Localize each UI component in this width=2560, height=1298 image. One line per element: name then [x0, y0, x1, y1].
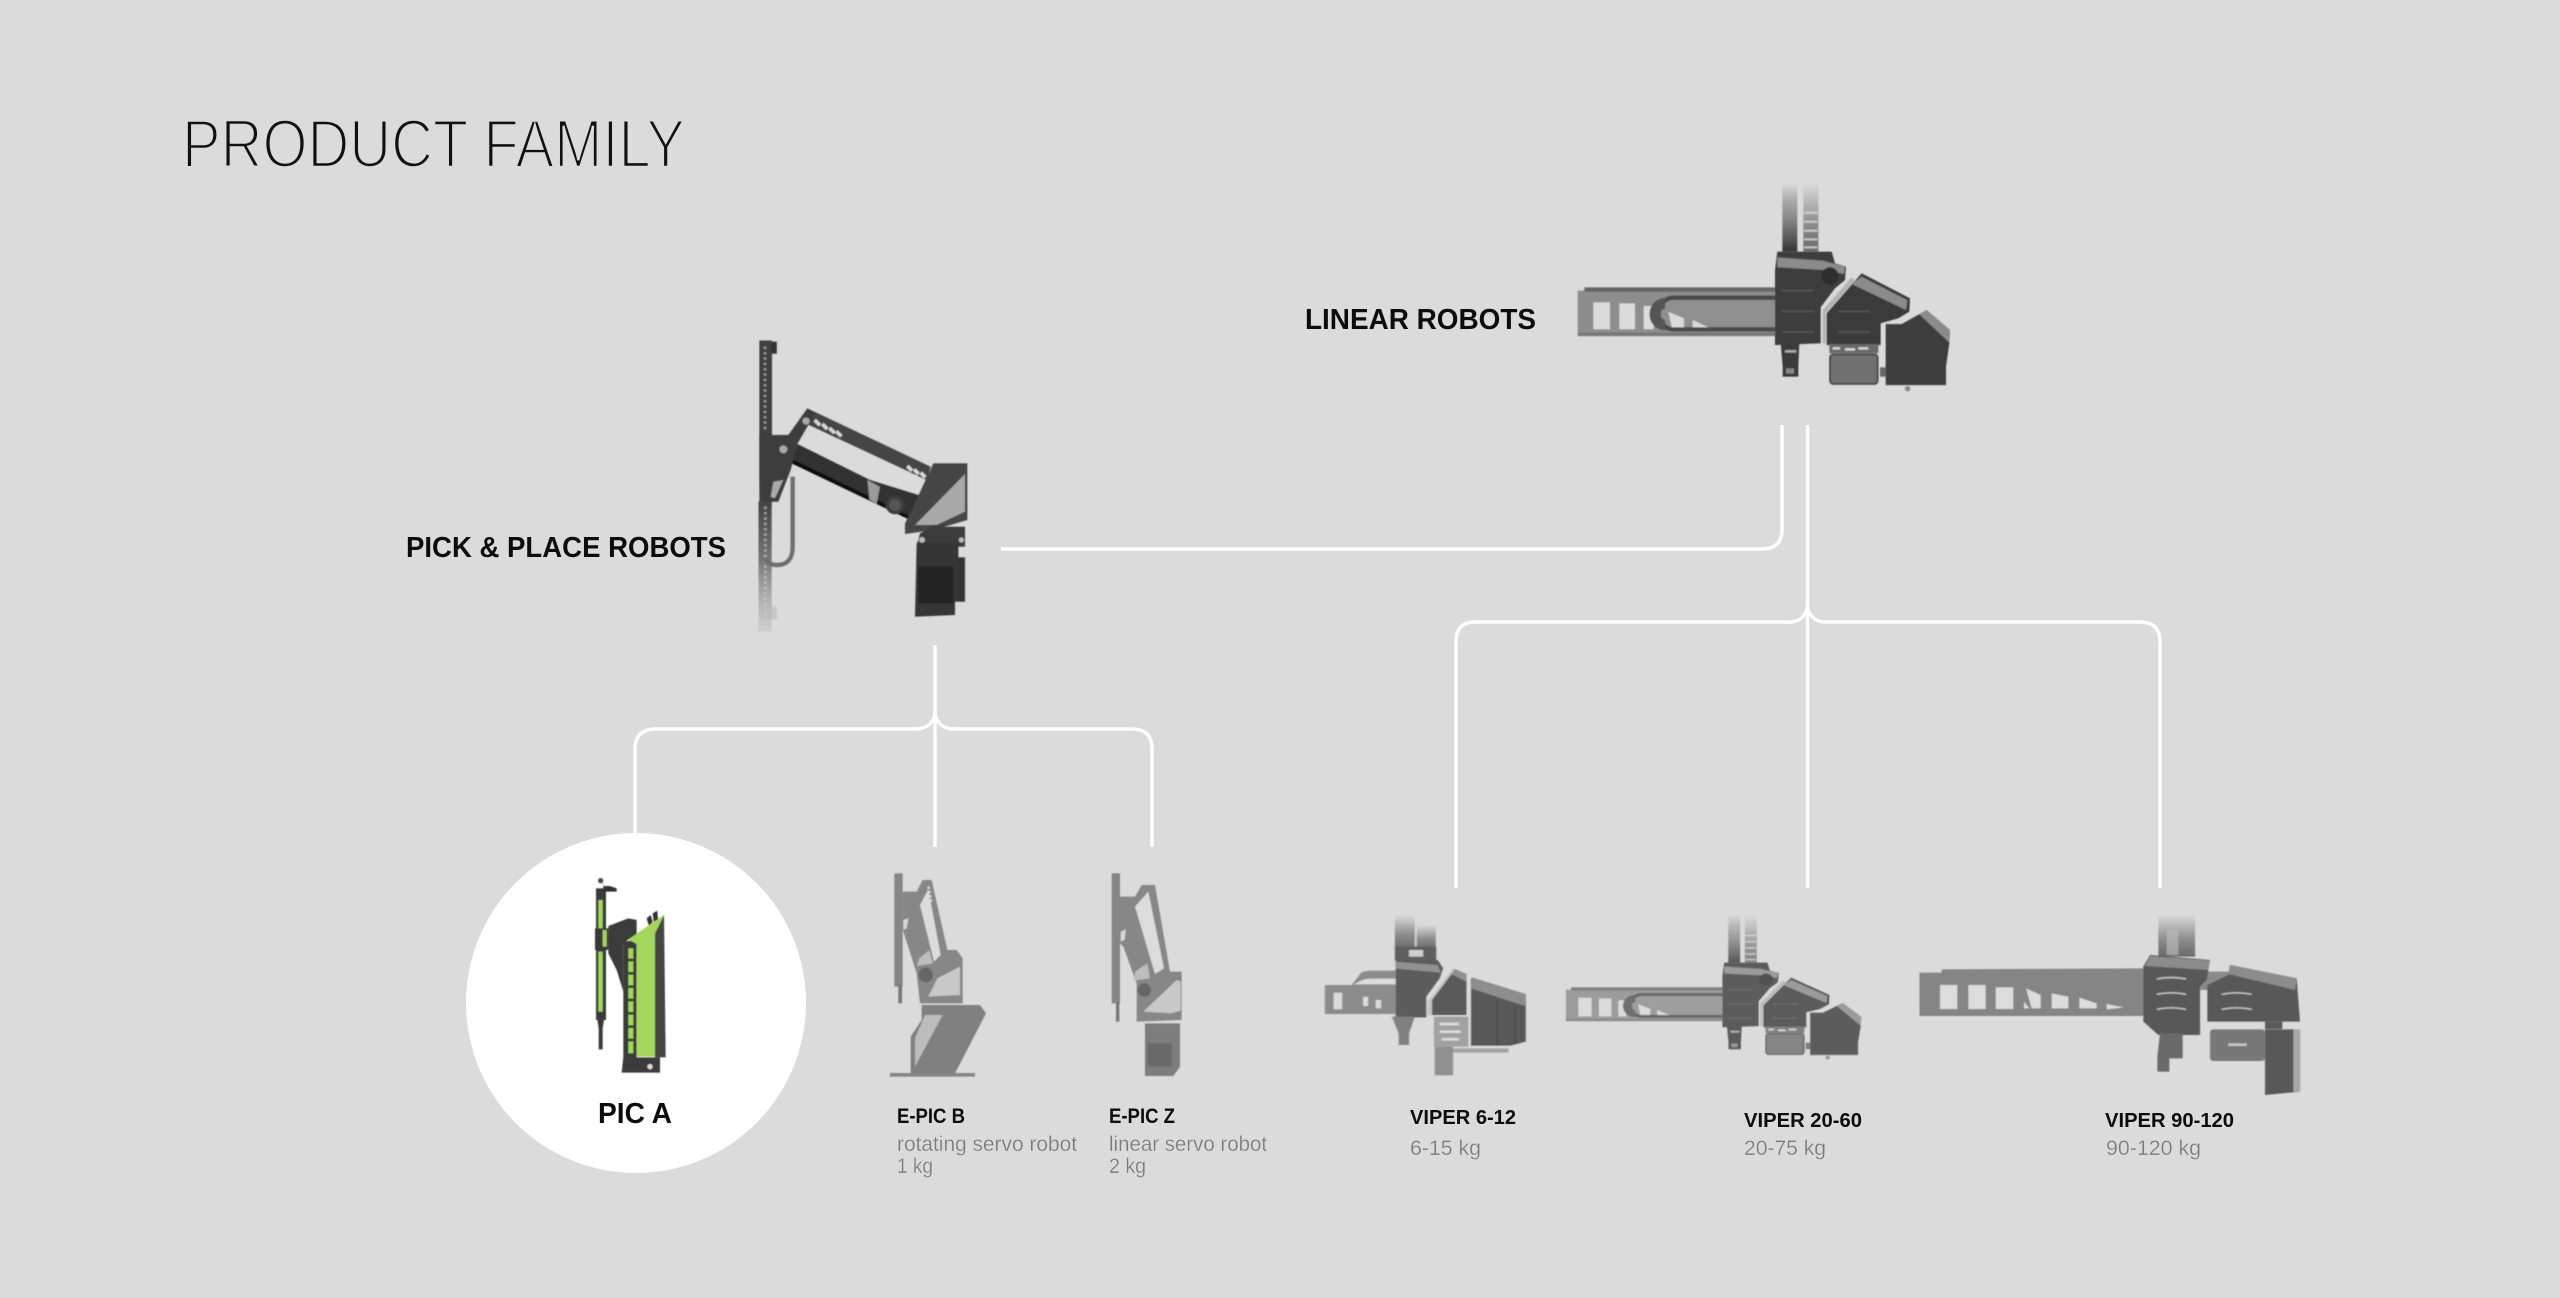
text block: VIPER 20-60: 20-75 kg: [1744, 1137, 1826, 1160]
label: pick and place robots: PICK & PLACE ROBOTS: [406, 532, 726, 564]
label: PIC A: PIC A: [598, 1098, 672, 1130]
connector: linear robots branches: [1456, 425, 2160, 888]
connector: pick and place branches: [635, 645, 1152, 847]
text block: VIPER 90-120: VIPER 90-120: [2105, 1110, 2234, 1132]
text block: E-PIC B: [897, 1105, 1077, 1178]
text block: VIPER 20-60: [1744, 1110, 1862, 1160]
icon: linear robot: [1578, 183, 1950, 391]
text block: E-PIC B: rotating servo robot: [897, 1133, 1077, 1156]
icon: E-PIC B robot: [890, 873, 986, 1077]
text block: E-PIC Z: E-PIC Z: [1109, 1105, 1175, 1128]
title: PRODUCT FAMILY: [182, 106, 685, 182]
text block: VIPER 6-12: 6-15 kg: [1410, 1137, 1481, 1160]
text block: VIPER 90-120: 90-120 kg: [2106, 1137, 2201, 1160]
text block: VIPER 6-12: VIPER 6-12: [1410, 1107, 1516, 1129]
icon: VIPER 6-12 robot: [1325, 915, 1526, 1075]
label: linear robots: LINEAR ROBOTS: [1305, 304, 1536, 336]
text block: E-PIC Z: 2 kg: [1109, 1155, 1146, 1178]
text block: VIPER 20-60: VIPER 20-60: [1744, 1110, 1862, 1132]
icon: VIPER 90-120 robot: [1919, 915, 2300, 1095]
icon: E-PIC Z robot: [1112, 873, 1182, 1076]
text block: E-PIC B: 1 kg: [897, 1155, 933, 1178]
text block: VIPER 90-120: [2105, 1110, 2234, 1160]
text block: E-PIC Z: [1109, 1105, 1267, 1178]
icon: PIC A robot: [595, 878, 666, 1073]
icon: pick and place robot: [758, 341, 967, 632]
highlight circle: [466, 833, 806, 1173]
text block: E-PIC B: E-PIC B: [897, 1105, 965, 1128]
icon: VIPER 20-60 robot: [1566, 915, 1861, 1059]
text block: E-PIC Z: linear servo robot: [1109, 1133, 1267, 1156]
connector: pick and place to linear robots: [1001, 425, 1782, 549]
panel: PIC A highlighted product: [466, 833, 806, 1173]
text block: VIPER 6-12: [1410, 1107, 1516, 1160]
